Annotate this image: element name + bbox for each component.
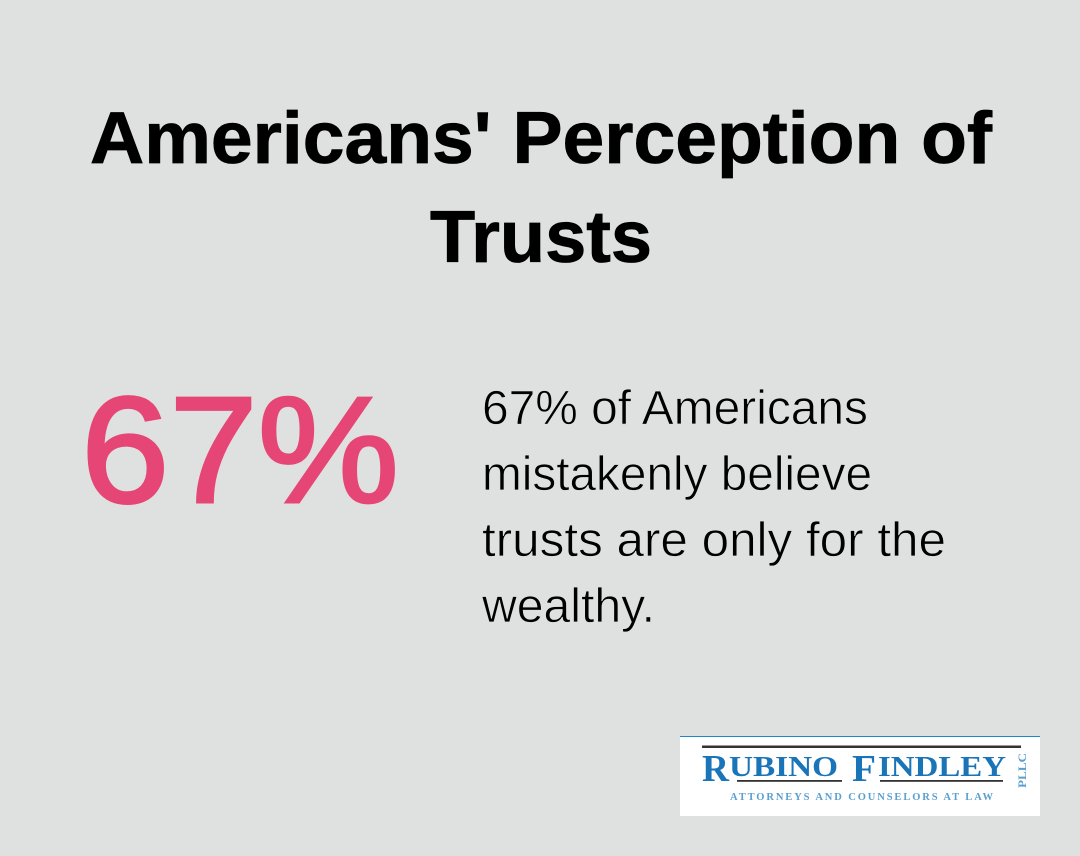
title: Trusts	[430, 197, 652, 278]
description text: 67% of Americans	[482, 382, 868, 435]
logo: Rubino Findley PLLC: PLLC	[1015, 753, 1029, 788]
title	[90, 98, 993, 278]
description text: wealthy.	[481, 580, 655, 633]
logo: Rubino Findley PLLC: INDLEY	[878, 751, 1006, 783]
description text	[481, 382, 946, 633]
logo: Rubino Findley PLLC	[680, 736, 1040, 816]
description text: mistakenly believe	[482, 448, 872, 501]
logo: Rubino Findley PLLC: F	[852, 748, 876, 790]
logo: Rubino Findley PLLC: R	[702, 748, 730, 790]
big statistic: 67%	[81, 365, 399, 534]
logo: Rubino Findley PLLC: ATTORNEYS AND COUNSELORS AT LAW	[730, 792, 994, 803]
logo: Rubino Findley PLLC: UBINO	[729, 751, 838, 783]
title: Americans' Perception of	[90, 98, 993, 179]
description text: trusts are only for the	[482, 514, 946, 567]
